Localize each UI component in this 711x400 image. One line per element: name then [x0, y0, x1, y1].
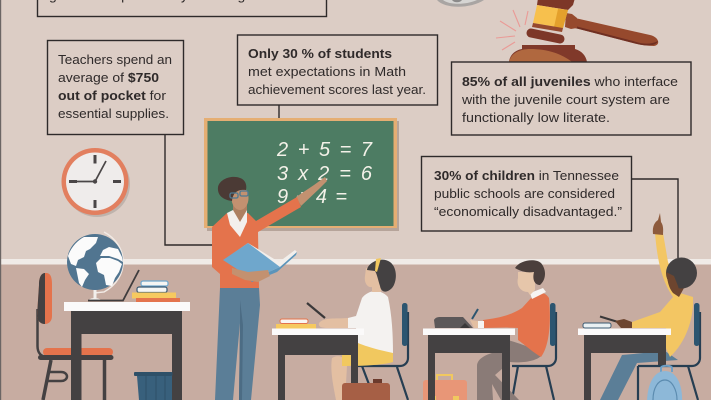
cuff, hand and pen	[472, 309, 478, 319]
callout: juveniles: 85% of all juveniles who interface	[462, 74, 678, 89]
callout: teachers out of pocket	[48, 40, 184, 134]
book stack	[132, 281, 180, 302]
gold band	[533, 5, 568, 28]
chalkboard: 3 x 2 = 6	[277, 163, 373, 185]
chair	[512, 312, 556, 400]
icon: globe	[67, 232, 123, 301]
neck	[233, 203, 247, 222]
student: boy in orange	[477, 260, 556, 400]
headband	[375, 258, 381, 272]
face	[667, 270, 685, 297]
wastebasket	[134, 372, 172, 400]
sweater	[483, 293, 550, 357]
icon: gavel	[496, 0, 658, 62]
sweater with raised arm	[632, 233, 693, 357]
student desk: middle	[423, 309, 515, 400]
laptop	[88, 270, 139, 300]
collar	[530, 288, 546, 299]
handle	[575, 18, 658, 46]
teacher	[212, 177, 327, 400]
student: raised hand	[600, 213, 700, 400]
chalk equations: 2 + 5 = 7	[276, 139, 373, 161]
connector: teachers box to teacher	[165, 134, 212, 245]
hair	[218, 177, 246, 201]
callout: economically disadvantaged: 30% of children in Tennessee	[434, 168, 619, 183]
legs	[215, 288, 260, 400]
callout: teachers out of pocket: Teachers spend an	[58, 52, 172, 67]
chair	[638, 312, 700, 400]
head lower	[532, 23, 563, 32]
skirt	[342, 343, 393, 366]
head upper	[537, 0, 575, 10]
face	[232, 186, 248, 210]
teacher chair	[37, 273, 114, 400]
torso and arm	[212, 197, 301, 288]
shirt	[348, 291, 393, 353]
callout: math achievement	[238, 35, 438, 105]
callout: economically disadvantaged: public schools are considered	[434, 186, 615, 201]
raised hand	[653, 213, 663, 235]
tablet	[434, 317, 473, 328]
open book	[224, 243, 297, 279]
tablet held	[600, 316, 618, 322]
callout: teachers out of pocket: essential supplies.	[58, 106, 169, 121]
writing hand	[615, 319, 632, 328]
callout: math achievement: achievement scores last year.	[248, 82, 426, 97]
callout: teachers out of pocket: out of pocket for	[58, 88, 167, 103]
hair	[666, 258, 697, 288]
books	[280, 319, 308, 324]
holding hand	[232, 268, 270, 282]
callout: juveniles	[452, 62, 691, 135]
chalkboard	[204, 118, 399, 231]
hair	[515, 260, 545, 285]
legs	[600, 351, 678, 400]
callout: math achievement: Only 30 % of students	[248, 46, 392, 61]
book	[583, 323, 611, 328]
impact marks	[496, 10, 528, 50]
collar	[565, 13, 577, 29]
collar	[227, 210, 247, 237]
callout: teachers out of pocket: average of $750	[58, 70, 159, 85]
backpack	[647, 366, 682, 400]
legs	[477, 340, 541, 400]
chair	[358, 312, 408, 400]
pen	[307, 303, 325, 318]
raised forearm and hand	[296, 177, 327, 206]
callout: economically disadvantaged: “economically disadvantaged.”	[434, 204, 622, 219]
icon: wall clock	[62, 148, 130, 217]
icon: scales fragment at top	[437, 0, 484, 7]
student desk: right	[578, 316, 671, 400]
glasses	[230, 191, 248, 198]
callout: juveniles: functionally low literate.	[462, 110, 610, 125]
bags: satchels	[342, 375, 467, 400]
connector: math box to chalkboard	[278, 105, 280, 118]
legs	[331, 356, 347, 400]
teacher desk	[64, 302, 190, 400]
top callout box (cropped)	[38, 0, 326, 16]
face	[518, 272, 535, 295]
callout: math achievement: met expectations in Math	[248, 64, 406, 79]
chalkboard: 9 ÷ 4 =	[277, 186, 347, 208]
face	[365, 268, 381, 292]
student: girl	[319, 258, 408, 400]
callout: juveniles: with the juvenile court system are	[461, 92, 670, 107]
sound block	[509, 45, 587, 62]
student desk: left	[272, 303, 364, 400]
connector: children box to student	[632, 179, 678, 258]
callout: economically disadvantaged	[422, 156, 632, 231]
hair	[367, 260, 396, 292]
arm	[319, 318, 348, 328]
